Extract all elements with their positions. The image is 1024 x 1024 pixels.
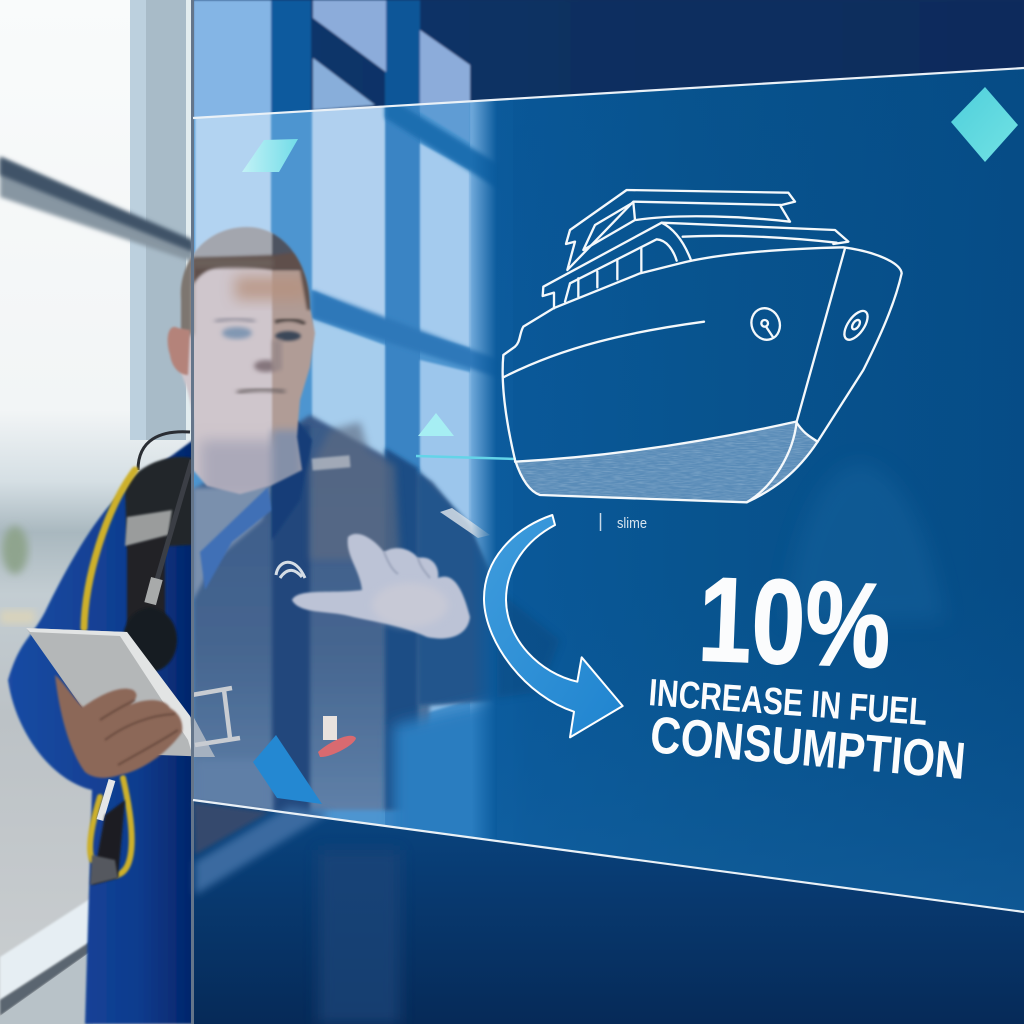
slime label bbox=[600, 513, 647, 532]
cabin windows bbox=[565, 239, 677, 302]
icon: teal triangle bbox=[418, 413, 454, 436]
background: room behind glass bbox=[193, 0, 1024, 860]
arrow bbox=[484, 515, 623, 737]
window frame bbox=[130, 0, 146, 440]
chest emblem and buckle bbox=[192, 508, 490, 757]
portholes bbox=[747, 304, 784, 344]
lower panes bbox=[194, 101, 496, 827]
icon: teal parallelogram bbox=[242, 139, 298, 172]
worker bbox=[8, 220, 520, 1024]
hair bbox=[194, 226, 274, 258]
tank reflection bbox=[310, 422, 400, 560]
sleeve visible on glass bbox=[497, 590, 560, 698]
lower deck bbox=[543, 223, 848, 308]
side stripe bbox=[503, 322, 704, 377]
pointer line to hull bbox=[416, 456, 516, 459]
shirt bbox=[193, 486, 270, 600]
bow edge bbox=[747, 248, 845, 502]
reflection of worker bbox=[785, 462, 945, 620]
tablet bbox=[26, 628, 215, 757]
upper deck bbox=[566, 190, 795, 270]
hull waterline bbox=[515, 422, 796, 462]
brows and eyes bbox=[215, 318, 255, 322]
glass edge bbox=[191, 0, 194, 1024]
collar bbox=[200, 487, 272, 590]
side hair outside glass bbox=[180, 256, 196, 338]
air tank and strap bbox=[84, 432, 192, 885]
worker head bbox=[180, 226, 316, 495]
ear bbox=[168, 327, 190, 375]
gesturing hand bbox=[292, 534, 470, 639]
ship illustration bbox=[503, 190, 902, 503]
icon: blue quadrilateral bbox=[253, 735, 322, 804]
worker body: jacket bbox=[8, 440, 193, 1024]
slime label: slime bbox=[617, 515, 647, 532]
neck shade bbox=[195, 435, 275, 494]
holding hand bbox=[55, 675, 182, 778]
stat: 10%: 10% bbox=[696, 552, 893, 693]
bottom band bbox=[193, 800, 1024, 1024]
panel borders bbox=[193, 68, 1024, 912]
sill bbox=[0, 897, 93, 1000]
diagonal mullions bbox=[382, 106, 494, 186]
caption line 1: INCREASE IN FUEL bbox=[647, 672, 929, 734]
torso seen through glass bbox=[194, 413, 494, 840]
hull outline bbox=[503, 247, 902, 502]
forehead warm tone bbox=[235, 276, 310, 300]
nose and mouth bbox=[254, 360, 278, 372]
hull slime area bbox=[513, 420, 820, 503]
yellow hose bbox=[84, 470, 135, 628]
outdoor window at left bbox=[0, 0, 193, 1024]
top band panes bbox=[194, 0, 472, 117]
icon: teal diamond bbox=[951, 87, 1018, 162]
